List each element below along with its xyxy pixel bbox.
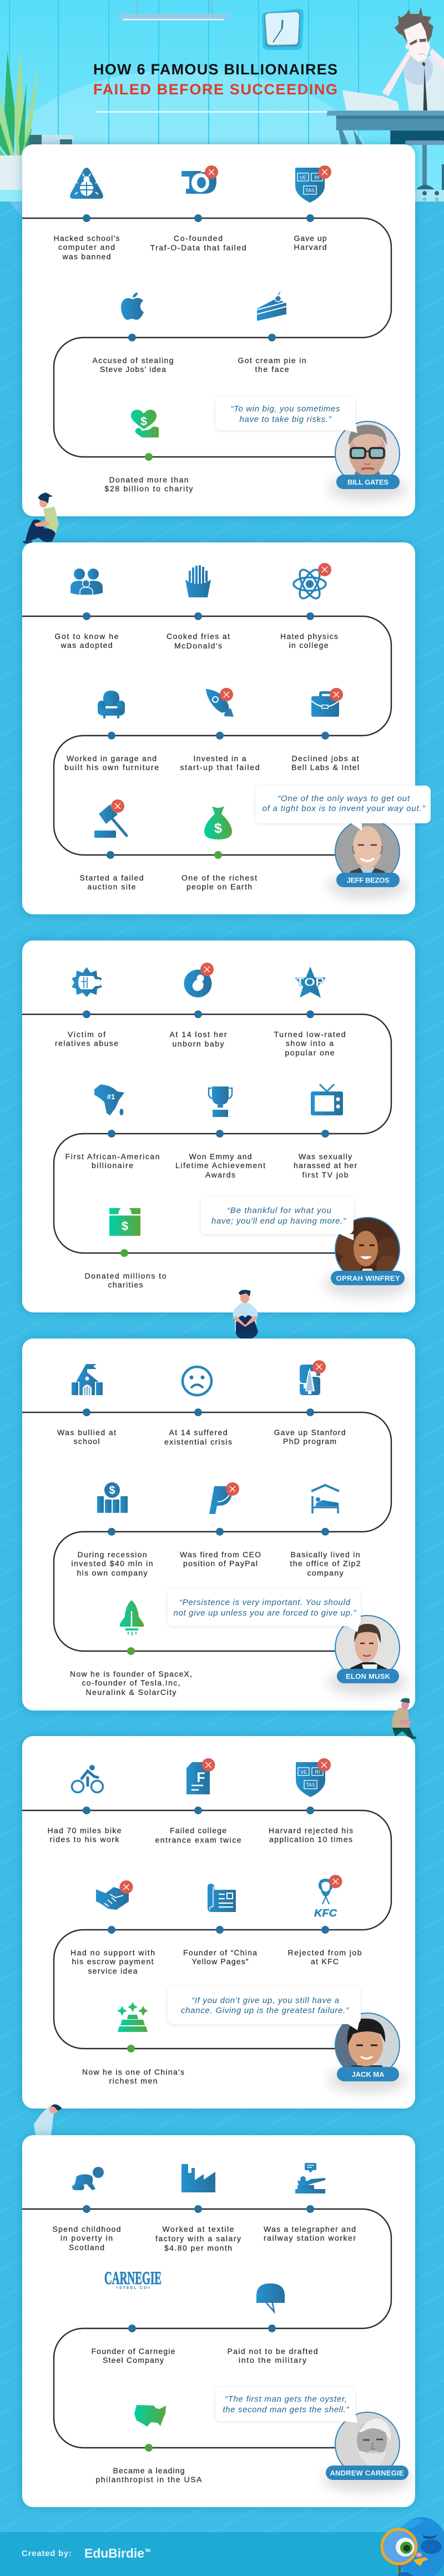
text: row 3 captions: One of the richest bbox=[181, 873, 257, 882]
quote: Elon Musk: “Persistence is very important. You should bbox=[179, 1598, 351, 1607]
quote: Andrew Carnegie: the second man gets the shell.” bbox=[223, 2405, 350, 2414]
footer: created by: EduBirdie bbox=[84, 2546, 144, 2560]
text: row 3 captions: philanthropist in the USA bbox=[95, 2475, 202, 2484]
icon: failed badge bbox=[318, 563, 331, 576]
icon: failed badge bbox=[226, 1482, 239, 1496]
name pill: Elon Musk bbox=[337, 1669, 399, 1683]
footer bar bbox=[0, 2532, 444, 2576]
icon: handshake bbox=[96, 1887, 129, 1910]
icon: Traf-O-Data logo bbox=[181, 171, 216, 194]
portrait: Bill Gates bbox=[327, 420, 407, 501]
text: row 1 captions: show into a bbox=[286, 1039, 334, 1048]
text: row 2 captions: Lifetime Achievement bbox=[175, 1161, 265, 1170]
text: row 2 captions: built his own furniture bbox=[64, 763, 159, 772]
portrait: Oprah Winfrey bbox=[324, 1216, 411, 1297]
quote: Bill Gates bbox=[215, 396, 357, 433]
text: row 1 captions: was adopted bbox=[60, 641, 112, 650]
icon: failed exam paper bbox=[186, 1762, 210, 1794]
text: row 1 captions bbox=[48, 1826, 353, 1844]
icon: USA map bbox=[134, 2405, 166, 2427]
quote: Bill Gates: “To win big, you sometimes bbox=[231, 404, 340, 414]
text: row 2 captions: the office of Zip2 bbox=[290, 1559, 361, 1568]
icon: Africa number one: #1 bbox=[107, 1093, 115, 1101]
icon: bike rider bbox=[72, 1765, 103, 1792]
text: row 2 captions bbox=[70, 1948, 362, 1975]
icon: PayPal logo bbox=[209, 1486, 233, 1514]
text: row 2 captions: company bbox=[307, 1568, 343, 1577]
name pill: Jack Ma: JACK MA bbox=[352, 2070, 385, 2079]
icon: Harvard shield: TAS bbox=[305, 188, 315, 193]
text: row 2 captions: billionaire bbox=[92, 1161, 133, 1170]
text: row 2 captions: Declined jobs at bbox=[292, 754, 359, 763]
ceiling lamp bbox=[118, 0, 229, 20]
text: row 2 captions: Yellow Pages” bbox=[192, 1957, 249, 1966]
icon: adoptive family bbox=[70, 568, 103, 595]
text: row 1 captions: existential crisis bbox=[164, 1437, 232, 1446]
person sitting between panels bbox=[22, 492, 59, 544]
icon: trophy bbox=[209, 1086, 232, 1117]
text: row 1 captions: Hated physics bbox=[280, 632, 338, 641]
icon: bed in office bbox=[311, 1485, 339, 1513]
text: row 2 captions: position of PayPal bbox=[183, 1559, 258, 1568]
timeline path bbox=[22, 2205, 391, 2452]
icon: fist abuse bbox=[72, 967, 102, 997]
mascot: bird with magnifier bbox=[382, 2517, 444, 2576]
text: row 2 captions: Basically lived in bbox=[291, 1550, 360, 1559]
quote: Jack Ma: “If you don’t give up, you still have a bbox=[191, 1996, 339, 2005]
name pill: Bill Gates: BILL GATES bbox=[347, 478, 389, 486]
timeline path bbox=[22, 214, 391, 461]
title: HOW 6 FAMOUS BILLIONAIRES bbox=[93, 61, 337, 78]
name pill: Elon Musk: ELON MUSK bbox=[346, 1672, 391, 1681]
icon: failed badge bbox=[220, 688, 233, 701]
text: row 3 captions: richest men bbox=[109, 2076, 158, 2085]
text: row 1 captions: relatives abuse bbox=[55, 1039, 118, 1048]
portrait: Elon Musk bbox=[327, 1614, 407, 1695]
icon: bug warning bbox=[70, 168, 103, 199]
quote: Oprah Winfrey: “Be thankful for what you bbox=[227, 1206, 332, 1215]
text: row 2 captions: Worked in garage and bbox=[67, 754, 157, 763]
icon: Harvard shield: RI bbox=[315, 1769, 320, 1775]
icon: failed badge bbox=[205, 165, 218, 179]
icon: KFC logo: KFC bbox=[314, 1908, 337, 1919]
text: row 1 captions: Had 70 miles bike bbox=[48, 1826, 122, 1835]
icon: briefcase bbox=[311, 691, 339, 717]
text: row 1 captions: application 10 times bbox=[269, 1835, 352, 1844]
name pill: Oprah Winfrey bbox=[331, 1271, 405, 1285]
text: row 3 captions bbox=[70, 1669, 192, 1697]
icon: yellow pages newspaper bbox=[208, 1884, 236, 1912]
icon: Harvard shield bbox=[295, 168, 325, 203]
text: row 1 captions: computer and bbox=[58, 243, 115, 251]
name pill: Andrew Carnegie bbox=[326, 2466, 408, 2480]
text: row 2 captions bbox=[65, 1152, 357, 1179]
text: row 2 captions: Had no support with bbox=[70, 1948, 155, 1957]
text: row 1 captions: McDonald's bbox=[174, 641, 222, 650]
title underline bbox=[95, 111, 327, 113]
icon: failed badge bbox=[120, 1880, 133, 1894]
text: row 2 captions: Was fired from CEO bbox=[180, 1550, 261, 1559]
panel: Bill Gates bbox=[22, 144, 415, 516]
icon: school bbox=[72, 1364, 103, 1395]
icon: Harvard shield: VE bbox=[300, 1769, 307, 1775]
quote: Andrew Carnegie bbox=[215, 2387, 357, 2423]
text: row 3 captions: Now he is one of China's bbox=[82, 2067, 184, 2076]
text: row 1 captions: popular one bbox=[285, 1048, 335, 1057]
text: row 3 captions bbox=[84, 1271, 167, 1289]
text: row 3 captions: Started a failed bbox=[80, 873, 143, 882]
quote: Oprah Winfrey: have; you'll end up having more.” bbox=[211, 1216, 346, 1226]
icon: Harvard shield: RI bbox=[314, 175, 320, 180]
text: row 2 captions: the face bbox=[255, 365, 289, 374]
text: final caption bbox=[104, 475, 193, 493]
text: row 1 captions: Turned low-rated bbox=[274, 1030, 345, 1039]
icon: money bag bbox=[204, 806, 232, 839]
icon: failed badge bbox=[202, 1758, 215, 1772]
quote: Elon Musk: not give up unless you are forced to give up.” bbox=[173, 1608, 356, 1618]
person crouching on panel corner bbox=[392, 1698, 416, 1739]
portrait: Jack Ma bbox=[327, 2012, 407, 2093]
logo: Carnegie Steel: CARNEGIE bbox=[104, 2268, 162, 2288]
icon: armchair bbox=[98, 691, 125, 718]
icon: military helmet bbox=[256, 2283, 285, 2312]
timeline path bbox=[22, 1807, 391, 2052]
icon: telegraph bbox=[295, 2163, 325, 2193]
stressed man at desk bbox=[327, 7, 444, 144]
icon: auction gavel bbox=[94, 804, 127, 838]
text: row 1 captions: Harvard rejected his bbox=[269, 1826, 353, 1835]
icon: top star: TOP bbox=[296, 976, 325, 989]
icon: Harvard shield bbox=[296, 1762, 325, 1797]
icon: charity heart in hand bbox=[131, 410, 159, 437]
icon: Africa number one bbox=[94, 1084, 124, 1115]
icon: failed badge bbox=[329, 1875, 342, 1888]
icon: Stanford logo bbox=[300, 1365, 320, 1395]
icon: donation box bbox=[109, 1207, 140, 1236]
text: row 1 captions: At 14 suffered bbox=[169, 1428, 228, 1437]
text: row 1 captions: in college bbox=[289, 641, 329, 650]
quote: Jack Ma: chance. Giving up is the greatest failure.” bbox=[181, 2006, 349, 2015]
text: row 1 captions: Spend childhood bbox=[52, 2225, 121, 2233]
panel: Jeff Bezos bbox=[22, 542, 431, 914]
text: row 2 captions: start-up that failed bbox=[180, 763, 260, 772]
text: row 1 captions: in poverty in bbox=[60, 2233, 113, 2242]
text: row 2 captions: Got cream pie in bbox=[238, 356, 306, 365]
icon: failed badge bbox=[330, 688, 343, 701]
icon: Harvard shield: TAS bbox=[306, 1782, 315, 1788]
text: row 2 captions: Bell Labs & Intel bbox=[291, 763, 359, 772]
icon: sad face bbox=[183, 1367, 211, 1395]
text: row 2 captions: his escrow payment bbox=[72, 1957, 154, 1966]
icon: investment bars: $ bbox=[109, 1485, 115, 1497]
text: row 3 captions: Became a leading bbox=[113, 2466, 184, 2475]
text: row 2 captions: Founder of “China bbox=[183, 1948, 257, 1957]
person leaning over panel bbox=[34, 2104, 62, 2143]
title: FAILED BEFORE SUCCEEDING bbox=[93, 81, 337, 98]
text: row 2 captions: at KFC bbox=[311, 1957, 339, 1966]
text: row 3 captions: people on Earth bbox=[186, 882, 252, 891]
icon: top star bbox=[295, 967, 326, 998]
panel: Jack Ma bbox=[22, 1736, 415, 2109]
text: row 1 captions: Got to know he bbox=[54, 632, 119, 641]
portrait: Jeff Bezos bbox=[327, 818, 407, 899]
icon: Harvard shield: VE bbox=[300, 175, 306, 180]
text: row 1 captions: school bbox=[73, 1437, 100, 1446]
text: row 1 captions: Was bullied at bbox=[57, 1428, 116, 1437]
icon: rocket bbox=[206, 689, 234, 717]
text: row 2 captions: Was sexually bbox=[299, 1152, 352, 1161]
icon: cream pie bbox=[257, 292, 286, 321]
header scene bbox=[0, 0, 444, 269]
timeline path bbox=[22, 1010, 391, 1257]
text: row 2 captions: harassed at her bbox=[294, 1161, 357, 1170]
text: row 2 captions: first TV job bbox=[302, 1170, 349, 1179]
icon: donation box: $ bbox=[122, 1219, 128, 1233]
text: row 1 captions: was banned bbox=[62, 252, 111, 261]
text: final caption: $28 billion to charity bbox=[104, 484, 193, 493]
text: row 1 captions: Scotland bbox=[69, 2243, 104, 2252]
panel: Andrew Carnegie bbox=[22, 2135, 415, 2507]
text: row 2 captions bbox=[92, 356, 306, 374]
text: row 2 captions: Founder of Carnegie bbox=[91, 2347, 175, 2356]
text: row 1 captions: $4.80 per month bbox=[164, 2243, 232, 2252]
plant and items bbox=[0, 50, 74, 202]
icon: factory bbox=[181, 2164, 215, 2192]
icon: unborn baby bbox=[184, 969, 212, 997]
text: row 3 captions: auction site bbox=[88, 882, 136, 891]
icon: charity heart in hand: $ bbox=[140, 415, 147, 428]
text: row 2 captions: Accused of stealing bbox=[92, 356, 173, 365]
text: row 1 captions: factory with a salary bbox=[155, 2234, 241, 2243]
text: row 2 captions: During recession bbox=[78, 1550, 147, 1559]
timeline path bbox=[22, 612, 391, 859]
footer: created by: Created by: bbox=[22, 2549, 72, 2558]
icon: failed badge bbox=[317, 1758, 331, 1772]
icon: failed badge bbox=[318, 165, 331, 179]
icon: apple bbox=[121, 293, 144, 320]
text: row 1 captions: Was a telegrapher and bbox=[264, 2225, 356, 2233]
text: row 1 captions: At 14 lost her bbox=[170, 1030, 227, 1039]
name pill: Oprah Winfrey: OPRAH WINFREY bbox=[336, 1274, 400, 1282]
name pill: Jeff Bezos: JEFF BEZOS bbox=[346, 876, 390, 884]
text: row 2 captions: Rejected from job bbox=[287, 1948, 362, 1957]
text: row 1 captions: PhD program bbox=[283, 1437, 336, 1446]
icon: crawling baby bbox=[72, 2167, 104, 2190]
text: row 1 captions: Gave up bbox=[294, 234, 327, 243]
icon: investment bars bbox=[97, 1482, 128, 1513]
text: row 2 captions: Awards bbox=[205, 1170, 235, 1179]
logo: Carnegie Steel: =STEEL CO= bbox=[115, 2286, 150, 2290]
text: row 1 captions: entrance exam twice bbox=[155, 1835, 241, 1844]
text: row 1 captions: Cooked fries at bbox=[167, 632, 230, 641]
text: row 3 captions: Neuralink & SolarCity bbox=[85, 1688, 176, 1697]
text: row 1 captions bbox=[53, 234, 327, 261]
chair bbox=[405, 140, 444, 202]
text: row 1 captions: Gave up Stanford bbox=[274, 1428, 345, 1437]
text: row 1 captions: unborn baby bbox=[172, 1039, 224, 1048]
text: final caption: Donated more than bbox=[109, 475, 189, 484]
text: row 3 captions bbox=[95, 2466, 202, 2484]
quote: Jeff Bezos: “One of the only ways to get out bbox=[278, 794, 410, 803]
quote: Jeff Bezos: of a tight box is to invent your way out.” bbox=[262, 804, 425, 813]
quote: Jack Ma bbox=[168, 1986, 361, 2030]
text: row 2 captions bbox=[71, 1550, 361, 1577]
icon: atom bbox=[294, 567, 326, 601]
text: row 2 captions: invested $40 mln in bbox=[71, 1559, 153, 1568]
text: row 1 captions: Traf-O-Data that failed bbox=[150, 243, 246, 252]
quote: Bill Gates: have to take big risks.” bbox=[240, 415, 332, 424]
text: row 3 captions: Donated millions to bbox=[84, 1271, 167, 1280]
text: row 1 captions: Failed college bbox=[170, 1826, 226, 1835]
text: row 1 captions: Co-founded bbox=[174, 234, 223, 243]
wall clock bbox=[262, 9, 304, 50]
text: row 1 captions bbox=[55, 1030, 345, 1057]
text: row 1 captions: Hacked school's bbox=[53, 234, 120, 243]
name pill: Jeff Bezos bbox=[336, 873, 400, 887]
icon: green rocket bbox=[120, 1600, 144, 1636]
text: row 2 captions: First African-American bbox=[65, 1152, 160, 1161]
logo: Carnegie Steel bbox=[104, 2268, 162, 2290]
icon: failed badge bbox=[200, 963, 214, 976]
text: row 1 captions: Harvard bbox=[294, 243, 326, 251]
text: row 3 captions: charities bbox=[108, 1280, 143, 1289]
text: row 1 captions: railway station worker bbox=[264, 2233, 356, 2242]
name pill: Jack Ma bbox=[337, 2067, 399, 2081]
icon: fries bbox=[185, 565, 211, 597]
text: row 2 captions bbox=[64, 754, 359, 772]
text: row 2 captions: into the military bbox=[239, 2356, 306, 2364]
text: row 2 captions bbox=[91, 2347, 317, 2364]
text: row 2 captions: his own company bbox=[77, 1568, 148, 1577]
quote: Jeff Bezos bbox=[255, 786, 431, 831]
text: row 1 captions bbox=[57, 1428, 345, 1446]
icon: failed exam paper: F bbox=[196, 1770, 205, 1785]
text: row 1 captions: Worked at textile bbox=[162, 2225, 234, 2233]
text: row 2 captions: Steel Company bbox=[103, 2356, 164, 2364]
panel: Elon Musk bbox=[22, 1339, 415, 1710]
icon: failed badge bbox=[111, 799, 124, 813]
panel: Oprah Winfrey bbox=[22, 940, 415, 1312]
person sitting on panel edge bbox=[232, 1290, 258, 1346]
text: row 3 captions: Now he is founder of SpaceX, bbox=[70, 1669, 192, 1678]
icon: gold bars bbox=[117, 2002, 148, 2032]
text: row 3 captions bbox=[82, 2067, 184, 2085]
footer: created by: TM bbox=[145, 2548, 150, 2553]
text: row 3 captions: co-founder of Tesla.Inc, bbox=[82, 1678, 180, 1687]
quote: Oprah Winfrey bbox=[201, 1196, 354, 1240]
title bbox=[93, 61, 337, 98]
icon: television bbox=[311, 1084, 343, 1115]
icon: KFC logo bbox=[314, 1879, 337, 1919]
name pill: Bill Gates bbox=[336, 475, 400, 489]
text: row 1 captions: Victim of bbox=[68, 1030, 105, 1039]
text: row 2 captions: Won Emmy and bbox=[189, 1152, 252, 1161]
icon: money bag: $ bbox=[214, 821, 222, 836]
text: row 1 captions: rides to his work bbox=[50, 1835, 120, 1844]
text: row 2 captions: Steve Jobs' idea bbox=[100, 365, 166, 374]
footer: created by bbox=[22, 2546, 150, 2560]
icon: failed badge bbox=[312, 1360, 326, 1373]
name pill: Andrew Carnegie: ANDREW CARNEGIE bbox=[330, 2469, 404, 2477]
text: row 3 captions bbox=[80, 873, 257, 891]
quote: Elon Musk bbox=[168, 1588, 361, 1632]
text: row 2 captions: service idea bbox=[88, 1966, 138, 1975]
portrait: Andrew Carnegie bbox=[322, 2411, 413, 2492]
quote: Andrew Carnegie: “The first man gets the oyster, bbox=[225, 2394, 347, 2404]
text: row 1 captions bbox=[54, 632, 338, 650]
text: row 2 captions: Paid not to be drafted bbox=[228, 2347, 317, 2356]
timeline path bbox=[22, 1408, 391, 1655]
text: row 1 captions bbox=[52, 2225, 356, 2252]
text: row 2 captions: Invested in a bbox=[193, 754, 246, 763]
